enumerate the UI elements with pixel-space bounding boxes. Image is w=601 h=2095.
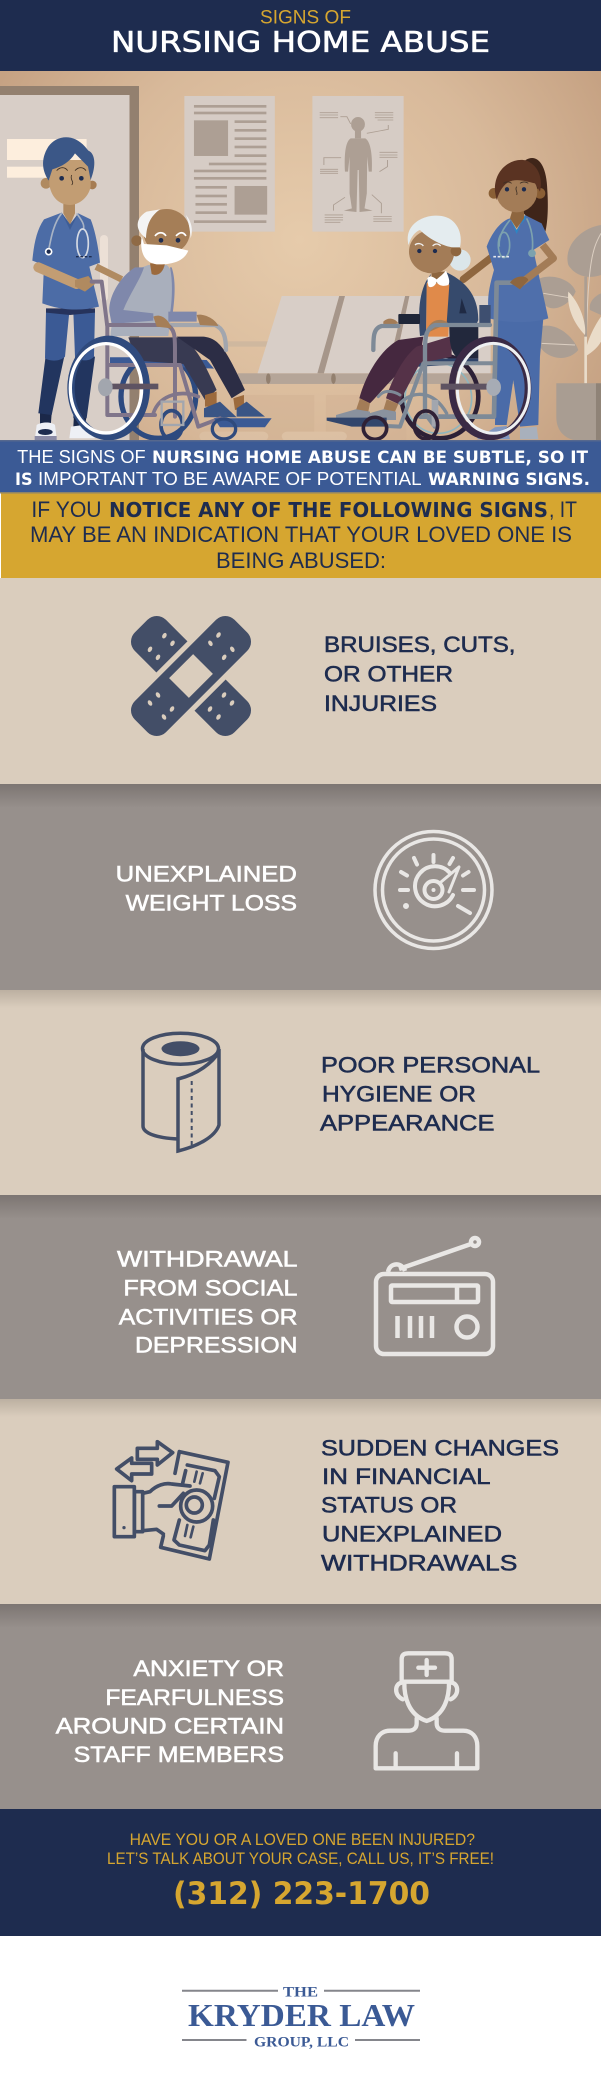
gold callout band bbox=[0, 492, 601, 578]
icon: nurse bbox=[376, 1653, 477, 1768]
text: anxiety: ANXIETY OR bbox=[133, 1656, 284, 1681]
front casters bbox=[161, 402, 236, 439]
text: withdrawal: FROM SOCIAL bbox=[123, 1276, 298, 1301]
text: finances: UNEXPLAINED bbox=[322, 1522, 502, 1547]
intro text: WARNING SIGNS. bbox=[428, 470, 590, 489]
text: anxiety: FEARFULNESS bbox=[105, 1685, 284, 1710]
wheelchair frame bbox=[92, 282, 226, 427]
female nurse with woman in wheelchair bbox=[327, 158, 553, 439]
woman bbox=[327, 216, 491, 427]
icon: hand with money bbox=[114, 1442, 228, 1559]
text: withdrawal: WITHDRAWAL bbox=[117, 1247, 298, 1272]
poster: article bbox=[184, 96, 275, 232]
floor shapes bbox=[199, 395, 406, 441]
front casters bbox=[363, 411, 438, 439]
intro text: THE SIGNS OF bbox=[17, 447, 146, 467]
callout text: BEING ABUSED: bbox=[216, 548, 386, 573]
icon: paper roll bbox=[142, 1033, 219, 1151]
door bbox=[0, 86, 139, 441]
text: hygiene: HYGIENE OR bbox=[322, 1082, 476, 1107]
text: finances: SUDDEN CHANGES bbox=[321, 1436, 559, 1461]
plant bbox=[540, 225, 601, 440]
icon: crossed bandages bbox=[119, 604, 263, 748]
text: bruises: BRUISES, CUTS, bbox=[324, 632, 516, 657]
intro text: IMPORTANT TO BE AWARE OF POTENTIAL bbox=[38, 469, 422, 489]
text: bruises bbox=[324, 632, 516, 716]
female nurse bbox=[463, 158, 553, 439]
phone number: (312) 223-1700 bbox=[173, 1876, 430, 1912]
panel: anxiety bbox=[0, 1604, 601, 1809]
cta text bbox=[107, 1831, 494, 1868]
text: weight loss: WEIGHT LOSS bbox=[126, 891, 297, 916]
panel: hygiene bbox=[0, 990, 601, 1195]
poster: anatomy bbox=[312, 96, 404, 232]
text: bruises: INJURIES bbox=[324, 691, 437, 716]
heading: signs of: SIGNS OF bbox=[260, 6, 351, 28]
panel: bruises bbox=[0, 578, 601, 784]
cta text: LET’S TALK ABOUT YOUR CASE, CALL US, IT’S FREE! bbox=[107, 1850, 494, 1868]
intro text: NURSING HOME ABUSE CAN BE SUBTLE, SO IT bbox=[152, 448, 589, 467]
bench bbox=[226, 296, 521, 384]
rear wheel bbox=[402, 355, 478, 438]
logo: GROUP, LLC bbox=[254, 2035, 349, 2051]
text: hygiene: APPEARANCE bbox=[320, 1111, 494, 1136]
text: finances bbox=[321, 1436, 559, 1576]
callout text: MAY BE AN INDICATION THAT YOUR LOVED ONE IS bbox=[30, 522, 572, 547]
cta text: HAVE YOU OR A LOVED ONE BEEN INJURED? bbox=[130, 1831, 475, 1849]
text: hygiene: POOR PERSONAL bbox=[321, 1053, 540, 1078]
male nurse bbox=[32, 137, 122, 440]
call to action bbox=[0, 1809, 601, 1936]
text: anxiety: STAFF MEMBERS bbox=[74, 1742, 284, 1767]
callout text: NOTICE ANY OF THE FOLLOWING SIGNS bbox=[109, 498, 548, 522]
hero illustration bbox=[0, 71, 601, 441]
logo: THE bbox=[283, 1985, 318, 2001]
front wheel bbox=[70, 339, 158, 437]
callout text: , IT bbox=[549, 497, 577, 522]
text: withdrawal: ACTIVITIES OR bbox=[119, 1305, 298, 1330]
male nurse with man in wheelchair bbox=[32, 137, 272, 440]
icon: radio bbox=[376, 1238, 493, 1354]
text: weight loss bbox=[116, 862, 297, 916]
text: bruises: OR OTHER bbox=[324, 662, 453, 687]
rear wheel bbox=[121, 355, 196, 438]
text: finances: STATUS OR bbox=[321, 1493, 457, 1518]
callout text bbox=[30, 497, 577, 573]
heading: nursing home abuse: NURSING HOME ABUSE bbox=[111, 26, 490, 59]
front wheel bbox=[441, 340, 529, 437]
man bbox=[109, 209, 265, 417]
text: finances: IN FINANCIAL bbox=[322, 1464, 491, 1489]
plant pot bbox=[556, 383, 601, 440]
intro band bbox=[0, 440, 601, 492]
text: anxiety bbox=[56, 1656, 284, 1767]
icon: scale gauge bbox=[375, 832, 492, 948]
panel: withdrawal bbox=[0, 1195, 601, 1399]
header banner bbox=[0, 0, 601, 71]
panel: finances bbox=[0, 1399, 601, 1604]
text: finances: WITHDRAWALS bbox=[321, 1551, 517, 1576]
text: withdrawal: DEPRESSION bbox=[135, 1333, 298, 1358]
logo bbox=[182, 1985, 420, 2051]
panel: weight loss bbox=[0, 784, 601, 990]
text: hygiene bbox=[320, 1053, 540, 1136]
footplate bbox=[214, 418, 272, 427]
wheelchair frame bbox=[373, 283, 512, 427]
text: withdrawal bbox=[117, 1247, 298, 1358]
intro text bbox=[15, 447, 590, 489]
intro text: IS bbox=[15, 470, 33, 489]
text: weight loss: UNEXPLAINED bbox=[116, 862, 297, 887]
logo: KRYDER LAW bbox=[188, 1997, 415, 2033]
text: anxiety: AROUND CERTAIN bbox=[56, 1713, 284, 1738]
callout text: IF YOU bbox=[31, 497, 102, 522]
